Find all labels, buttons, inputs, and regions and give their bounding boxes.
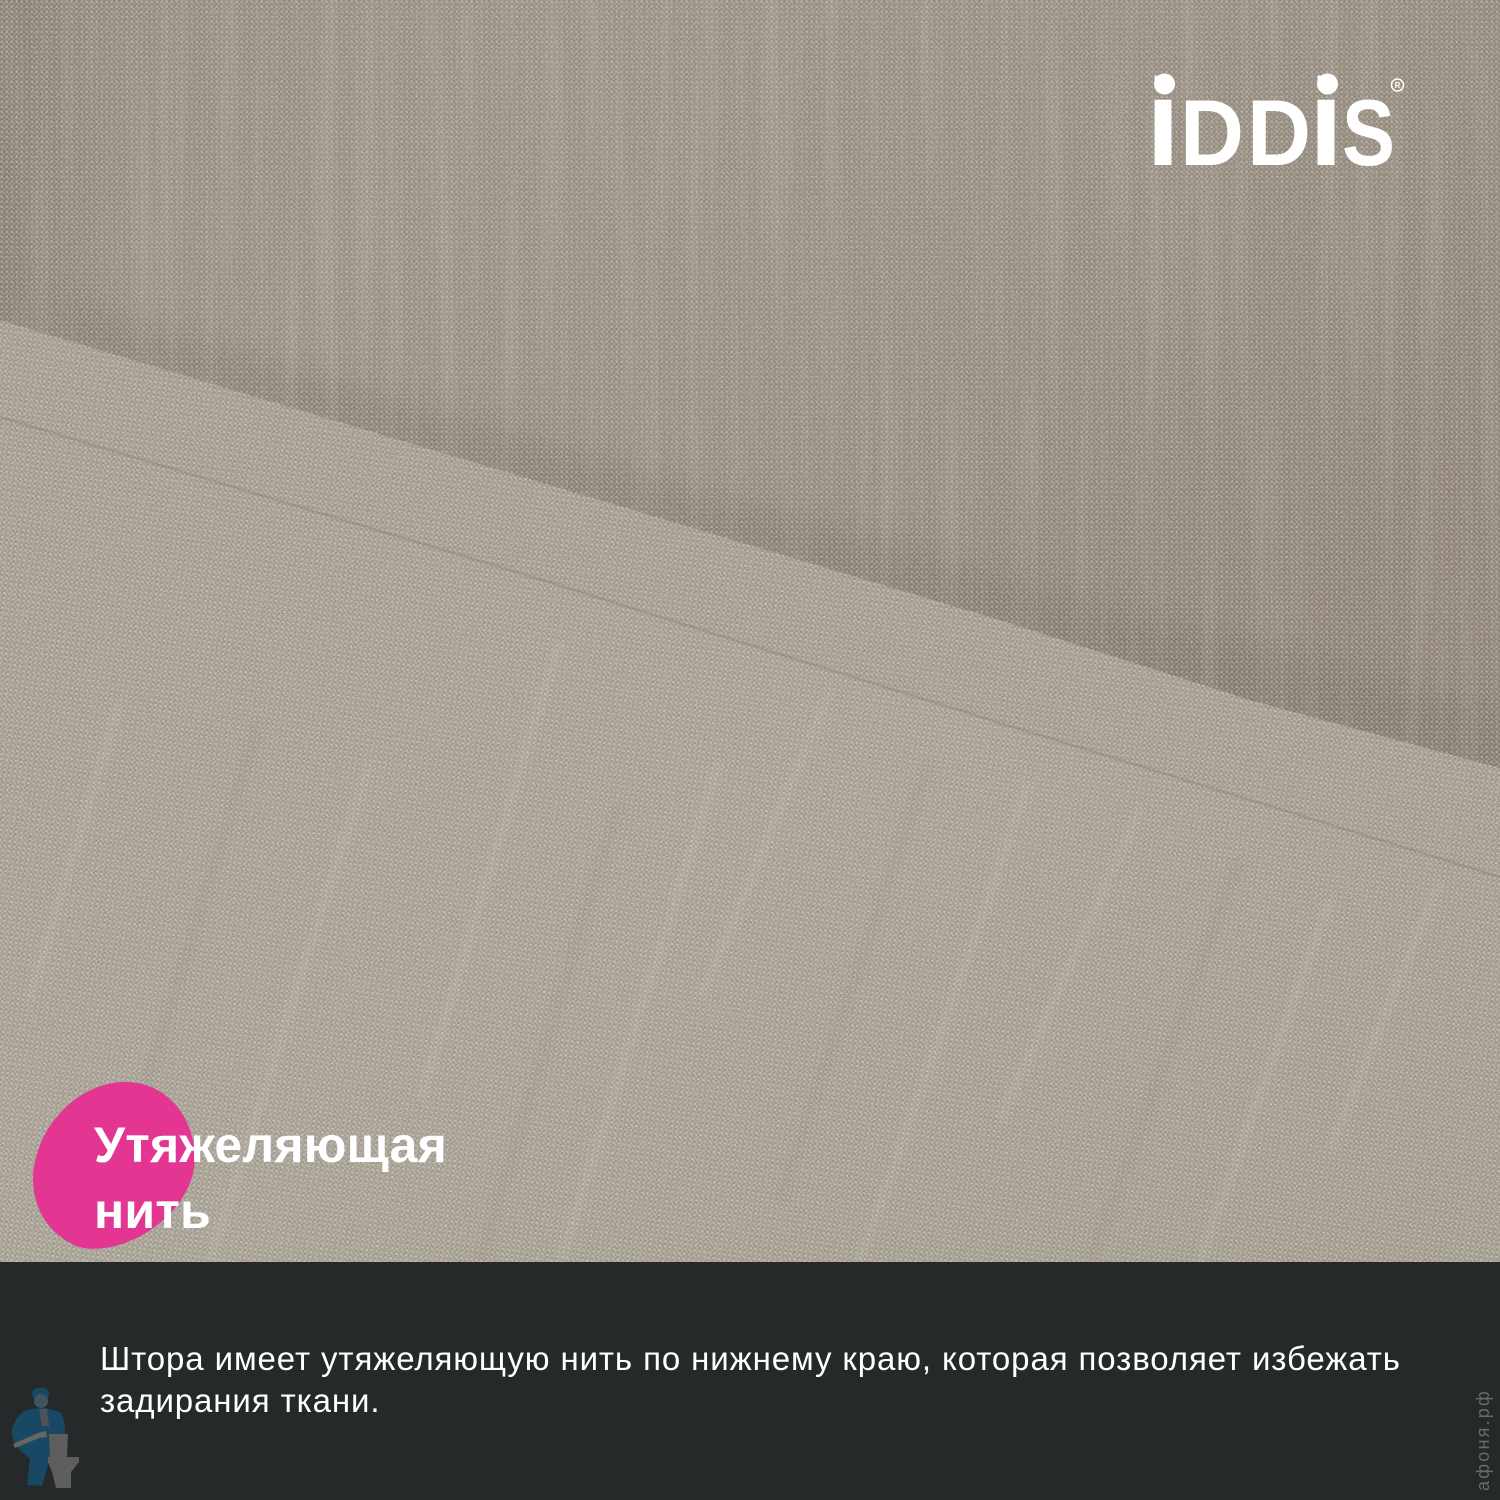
logo: iDDiS: D xyxy=(1247,80,1311,185)
body text: задирания ткани. xyxy=(100,1382,380,1419)
icon: plumber with toilet watermark xyxy=(12,1388,79,1488)
plumber cap xyxy=(32,1388,49,1398)
heading xyxy=(94,1117,447,1239)
body text xyxy=(100,1340,1401,1419)
logo: iDDiS: i xyxy=(1146,55,1180,192)
logo: iDDiS: i xyxy=(1309,55,1343,192)
logo: iDDiS: S xyxy=(1342,80,1395,185)
plumber overalls xyxy=(12,1408,65,1486)
bottom dark panel xyxy=(0,1262,1500,1500)
body text: Штора имеет утяжеляющую нить по нижнему краю, которая позволяет избежать xyxy=(100,1340,1401,1377)
watermark: афоня.рф: афоня.рф xyxy=(1473,1389,1493,1491)
heading: нить xyxy=(94,1183,211,1239)
heading: Утяжеляющая xyxy=(94,1117,447,1173)
plumber face xyxy=(34,1394,48,1408)
logo: iDDiS: D xyxy=(1180,80,1244,185)
pink blob behind heading xyxy=(33,1082,195,1249)
logo: iDDiS xyxy=(1146,55,1404,192)
toilet xyxy=(48,1434,79,1488)
logo: iDDiS: R xyxy=(1395,81,1401,90)
wrench xyxy=(13,1431,47,1448)
plumber shirt xyxy=(39,1409,49,1426)
